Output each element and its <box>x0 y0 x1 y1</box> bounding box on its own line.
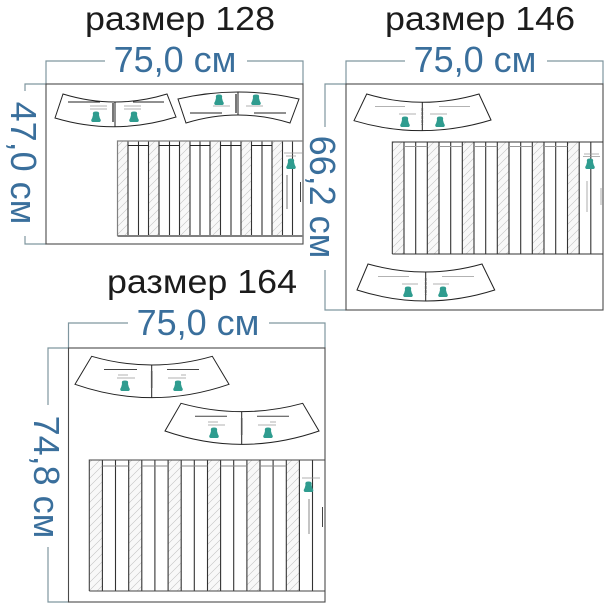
strips 128 <box>118 141 303 236</box>
width dimension 128: 75,0 см <box>114 39 236 80</box>
strips 146 <box>392 142 603 254</box>
heading: size 146: размер 146 <box>385 0 575 37</box>
layout frame 146 <box>346 84 603 310</box>
strips 164 <box>89 460 325 591</box>
width dimension 128 <box>46 39 303 84</box>
layout frame 164 <box>68 348 325 602</box>
panel: size 164 <box>26 263 325 602</box>
height dimension 146: 66,2 см <box>302 136 343 258</box>
collar piece 1 <box>354 94 491 131</box>
heading: size 164: размер 164 <box>107 263 297 300</box>
height dimension 164 <box>26 348 68 602</box>
height dimension 146 <box>302 84 346 310</box>
width dimension 164: 75,0 см <box>137 302 259 343</box>
width dimension 164 <box>68 302 325 348</box>
collar piece 2 <box>165 403 319 444</box>
collar piece 2 <box>178 92 299 123</box>
collar piece 2 <box>357 264 495 301</box>
collar piece 1 <box>55 94 176 127</box>
collar piece 1 <box>75 356 229 398</box>
panel: size 128 <box>3 0 303 244</box>
height dimension 128: 47,0 см <box>3 102 44 224</box>
heading: size 128: размер 128 <box>85 0 275 37</box>
width dimension 146 <box>346 39 603 84</box>
height dimension 164: 74,8 см <box>26 416 67 538</box>
width dimension 146: 75,0 см <box>414 39 536 80</box>
layout frame 128 <box>46 84 303 244</box>
panel: size 146 <box>302 0 603 310</box>
